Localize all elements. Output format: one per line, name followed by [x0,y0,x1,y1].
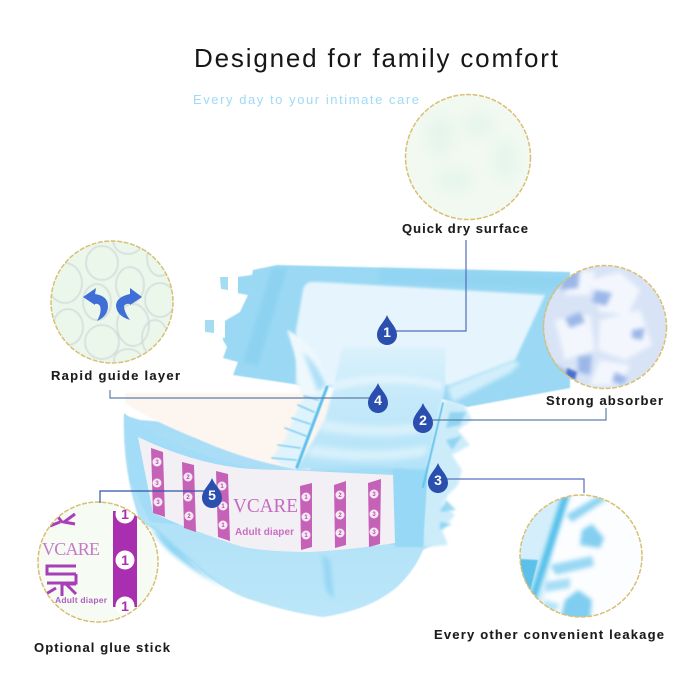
pink strips: 1 [304,515,308,521]
leader line 5 [100,491,212,503]
inner waist cream area [125,393,335,470]
leader line 4 [110,390,378,398]
waist blue band [124,413,402,545]
label: optional glue stick: Optional glue stick [34,640,171,655]
magnified brand text: VCARE [42,539,100,559]
pink strips: 2 [338,493,342,499]
circle: optional glue stick [38,502,158,622]
circle: quick dry surface [406,94,530,220]
pink strips: 2 [186,495,190,501]
pink strips: 1 [220,484,224,490]
leader line 1 [390,240,466,331]
pink strips: 1 [304,533,308,539]
leader line 3 [438,479,584,493]
marker 4 [368,383,388,413]
waist label [138,437,395,552]
circle: optional glue stick: 1 [121,506,129,522]
marker 3: 3 [434,472,442,488]
pink strips: 3 [155,460,159,466]
marker 5 [202,478,222,508]
marker 1 [377,315,397,345]
right waist blue block [393,466,428,547]
label: rapid guide layer: Rapid guide layer [51,368,180,383]
pink strips: 3 [372,512,376,518]
label: quick dry surface: Quick dry surface [402,221,528,236]
title: Designed for family comfort [194,43,559,73]
circle: strong absorber [544,266,666,388]
marker 2: 2 [419,412,427,428]
subtitle: Every day to your intimate care [193,92,419,107]
pink strips: 3 [155,481,159,487]
pink strips: 1 [304,495,308,501]
circle: every other convenient leakage [515,490,642,620]
marker 5: 5 [208,487,216,503]
pink strips: 2 [187,514,191,520]
pink strips: 2 [338,531,342,537]
left leak guard [287,330,329,405]
right side frills [418,400,472,547]
right leak guard [447,360,520,402]
pink strips: 3 [372,492,376,498]
pink strips: 3 [156,500,160,506]
diaper illustration [124,265,570,617]
core stitched edges [272,387,443,487]
circle: optional glue stick: 1 [121,552,129,568]
absorbent core [296,347,446,470]
pink strips: 2 [186,475,190,481]
marker 4: 4 [374,392,382,408]
icon: blue curved arrows [83,288,142,321]
back panel [223,265,570,407]
magnified logo marks [46,512,76,596]
leader line 2 [423,408,606,420]
left fringe [272,393,325,470]
front body [124,415,433,617]
circle: rapid guide layer [50,240,174,364]
VCARE brand: VCARE [233,495,298,517]
pink strips: 3 [372,530,376,536]
circle: optional glue stick: 1 [121,598,129,614]
pink strips: 1 [221,523,225,529]
pink strips: 2 [338,513,342,519]
pink strips [151,448,381,550]
magnified purple strip [113,511,137,607]
label: every other convenient leakage: Every other convenient leakage [434,627,664,642]
marker 1: 1 [383,324,391,340]
circle: optional glue stick: Adult diaper [55,595,108,605]
tape tabs [205,277,238,338]
marker 2 [413,403,433,433]
marker 3 [428,463,448,493]
adult diaper text: Adult diaper [235,527,294,538]
label: strong absorber: Strong absorber [546,393,663,408]
pink strips: 1 [221,504,225,510]
inner top sheet [296,282,545,385]
